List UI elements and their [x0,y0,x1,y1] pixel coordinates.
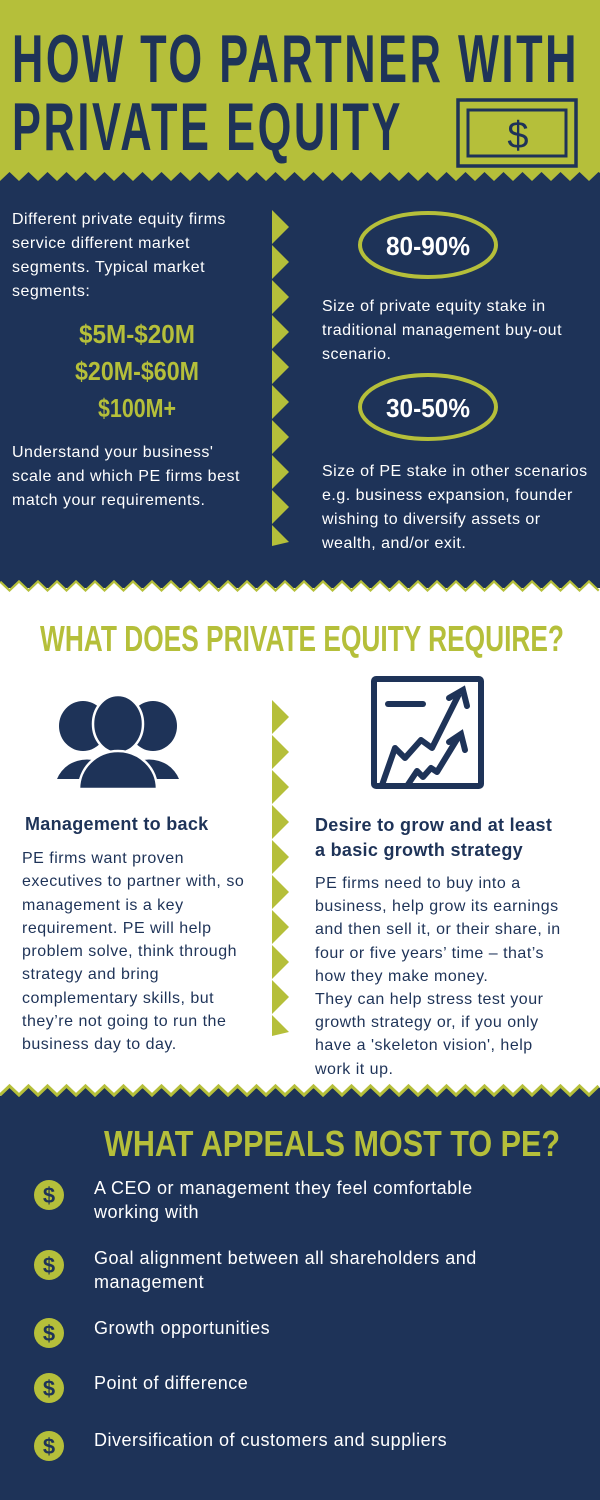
text: stake other: e.g. business expansion, founder [322,487,573,504]
item 1: $ [43,1183,55,1208]
text: management body: management is a key [22,897,184,914]
text: growth body: four or five years’ time – that’s [315,945,544,962]
item 2: Goal alignment between all shareholders and [94,1248,477,1268]
text: management body: requirement. PE will help [22,920,211,937]
text: growth body: work it up. [315,1061,393,1078]
chevron column 1 [272,210,289,546]
text: management body: they’re not going to run the [22,1013,226,1030]
text: segment ranges: $100M+ [98,393,176,423]
item 4 [34,1373,248,1403]
icon: growth chart [371,676,484,789]
text: growth body: and then sell it, or their share, in [315,921,561,938]
title [12,21,579,165]
text: understand scale: Understand your business' [12,444,213,461]
chevron column 2 [272,700,289,1036]
callout: 30-50% [358,373,498,441]
text: stake MBO: scenario. [322,346,391,363]
text: understand scale: scale and which PE firms best [12,468,240,485]
text: management body: executives to partner with, so [22,873,244,890]
item 4: $ [43,1376,55,1401]
text: stake other: Size of PE stake in other scenarios [322,463,588,480]
text: stake other: wishing to diversify assets or [322,511,541,528]
text: management body: strategy and bring [22,966,159,983]
item 2 [34,1248,477,1292]
text: stake other: wealth, and/or exit. [322,535,466,552]
text: understand scale [12,444,240,509]
text: stake MBO [322,298,562,363]
text: market segments intro: segments. Typical market [12,259,205,276]
heading: desire to grow: a basic growth strategy [315,840,523,860]
text: growth body: PE firms need to buy into a [315,875,521,892]
item 3: Growth opportunities [94,1318,270,1338]
text: growth body: how they make money. [315,968,488,985]
text: stake MBO: Size of private equity stake in [322,298,546,315]
icon: people [57,696,179,788]
icon: dollar bill [456,98,578,168]
heading: desire to grow: Desire to grow and at least [315,815,552,835]
text: segment ranges: $5M-$20M [79,319,195,349]
text: management body: complementary skills, but [22,990,214,1007]
text: market segments intro [12,211,226,300]
text: growth body: They can help stress test your [315,991,543,1008]
text: management body [22,850,244,1053]
text: management body: problem solve, think through [22,943,237,960]
item 1: working with [94,1202,199,1222]
text: market segments intro: service different market [12,235,190,252]
item 1: A CEO or management they feel comfortable [94,1178,473,1198]
heading: desire to grow [315,815,552,860]
callout: 30-50%: 30-50% [386,393,470,423]
item 3 [34,1318,270,1348]
text: understand scale: match your requirements. [12,492,205,509]
text: market segments intro: Different private equity firms [12,211,226,228]
text: stake other [322,463,588,552]
text: growth body: business, help grow its earnings [315,898,559,915]
item 4: Point of difference [94,1373,248,1393]
item 1 [34,1178,473,1222]
text: management body: PE firms want proven [22,850,184,867]
item 5: Diversification of customers and suppliers [94,1430,447,1450]
callout: 80-90% [358,211,498,279]
icon: dollar bill: $ [507,115,529,157]
text: stake MBO: traditional management buy-out [322,322,562,339]
item 2: management [94,1272,204,1292]
text: management body: business day to day. [22,1036,177,1053]
list: appeals [34,1178,477,1461]
text: market segments intro: segments: [12,283,90,300]
text: segment ranges [75,319,199,423]
text: growth body: growth strategy or, if you only [315,1014,539,1031]
text: growth body [315,875,561,1078]
item 5 [34,1430,447,1461]
callout: 80-90%: 80-90% [386,231,470,261]
text: growth body: have a 'skeleton vision', help [315,1037,533,1054]
item 3: $ [43,1321,55,1346]
text: segment ranges: $20M-$60M [75,356,199,386]
item 5: $ [43,1434,55,1459]
heading: management to back: Management to back [25,814,208,834]
item 2: $ [43,1253,55,1278]
